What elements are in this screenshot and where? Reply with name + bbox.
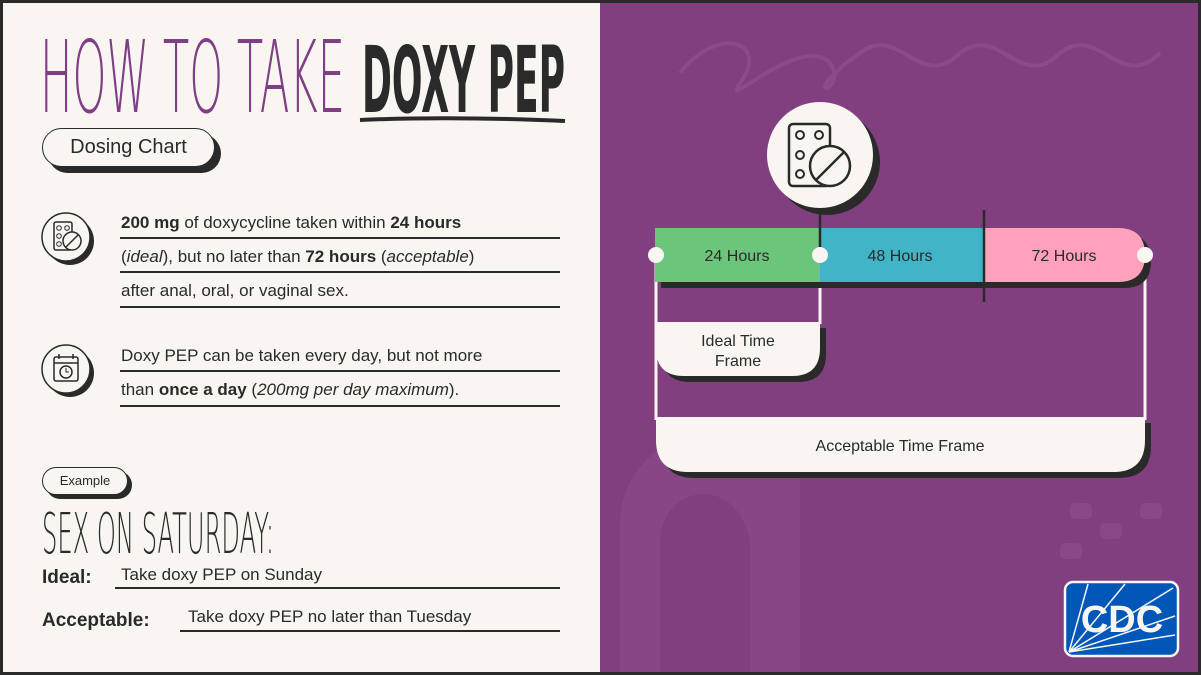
logo: CDC — [1064, 580, 1180, 658]
bar: 72 Hours — [1032, 248, 1096, 265]
example: acceptable: Take doxy PEP no later than Tuesday — [188, 607, 471, 626]
text: frequency: Doxy PEP can be taken every day, but not more — [121, 346, 482, 365]
ideal time frame box: Frame — [715, 353, 761, 370]
icon: pill circle — [767, 102, 880, 215]
example: ideal: Take doxy PEP on Sunday — [121, 565, 322, 584]
example: ideal: Ideal: — [42, 567, 92, 588]
example: acceptable: Acceptable: — [42, 610, 150, 631]
panel: left — [3, 3, 600, 672]
acceptable time frame box — [656, 417, 1151, 478]
acceptable time frame box: Acceptable Time Frame — [816, 438, 985, 455]
dots — [648, 247, 664, 263]
timeline chart — [648, 102, 1153, 478]
pill: dosing chart — [42, 128, 221, 173]
panel: right — [600, 3, 1198, 672]
text: dosing: 200 mg of doxycycline taken within 24 hours — [121, 213, 461, 232]
text: frequency: than once a day (200mg per day maximum). — [121, 380, 459, 399]
text: frequency — [120, 346, 560, 407]
icon: pills — [41, 212, 94, 265]
icon: calendar — [41, 344, 94, 397]
bar: 48 Hours — [868, 248, 932, 265]
connector lines — [654, 255, 658, 420]
pill: example: Example — [60, 473, 110, 488]
pill: dosing chart: Dosing Chart — [70, 136, 187, 158]
logo: CDC: CDC — [1081, 599, 1163, 641]
ideal time frame box — [656, 322, 826, 382]
bar: 24 Hours — [705, 248, 769, 265]
text: dosing — [120, 213, 560, 308]
text: dosing: after anal, oral, or vaginal sex. — [121, 281, 349, 300]
example: ideal — [42, 565, 560, 589]
pill: example — [42, 467, 132, 499]
ideal time frame box: Ideal Time — [701, 333, 775, 350]
text: dosing: (ideal), but no later than 72 hours (acceptable) — [121, 247, 474, 266]
bar — [655, 228, 1151, 288]
example: acceptable — [42, 607, 560, 632]
